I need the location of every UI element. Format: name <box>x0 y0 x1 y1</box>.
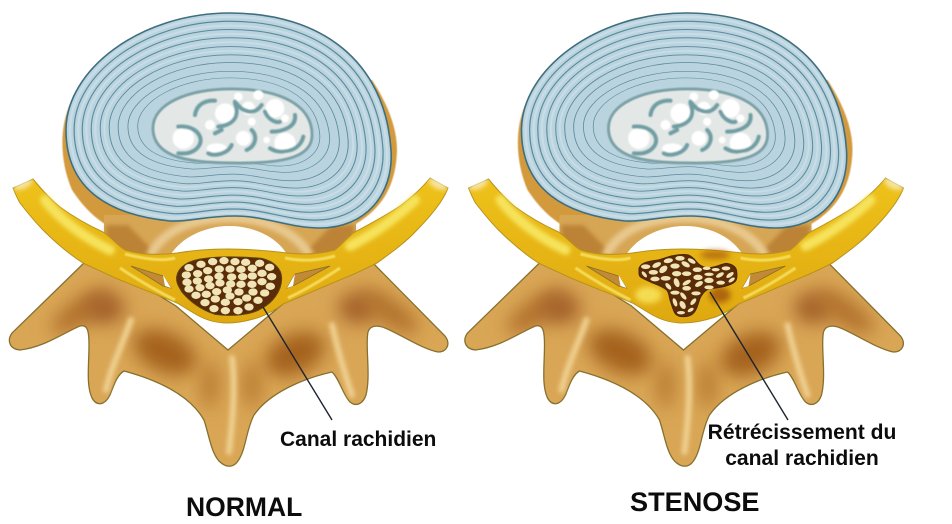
heading: stenose: STENOSE <box>630 486 759 517</box>
label: canal rachidien: Canal rachidien <box>280 428 436 451</box>
intervertebral disc <box>66 13 391 228</box>
panel: normal vertebra <box>9 13 449 466</box>
yellow nerve band, stenosis <box>467 175 905 323</box>
label: rétrécissement du canal rachidien: Rétrécissement du <box>708 421 896 444</box>
yellow nerve band <box>12 175 449 323</box>
bone: vertebral arch <box>9 80 448 466</box>
narrowed spinal canal with compressed nerve bundle <box>635 250 737 317</box>
spinal canal with nerve bundle <box>177 257 282 315</box>
panel: stenosis vertebra <box>465 13 905 466</box>
leader line: canal rachidien <box>263 307 332 420</box>
bone: vertebral arch, stenosis <box>465 80 903 466</box>
leader line: rétrécissement <box>710 292 788 420</box>
label: rétrécissement du canal rachidien: canal rachidien <box>725 447 879 470</box>
intervertebral disc, stenosis <box>522 13 847 228</box>
heading: normal: NORMAL <box>186 492 302 522</box>
